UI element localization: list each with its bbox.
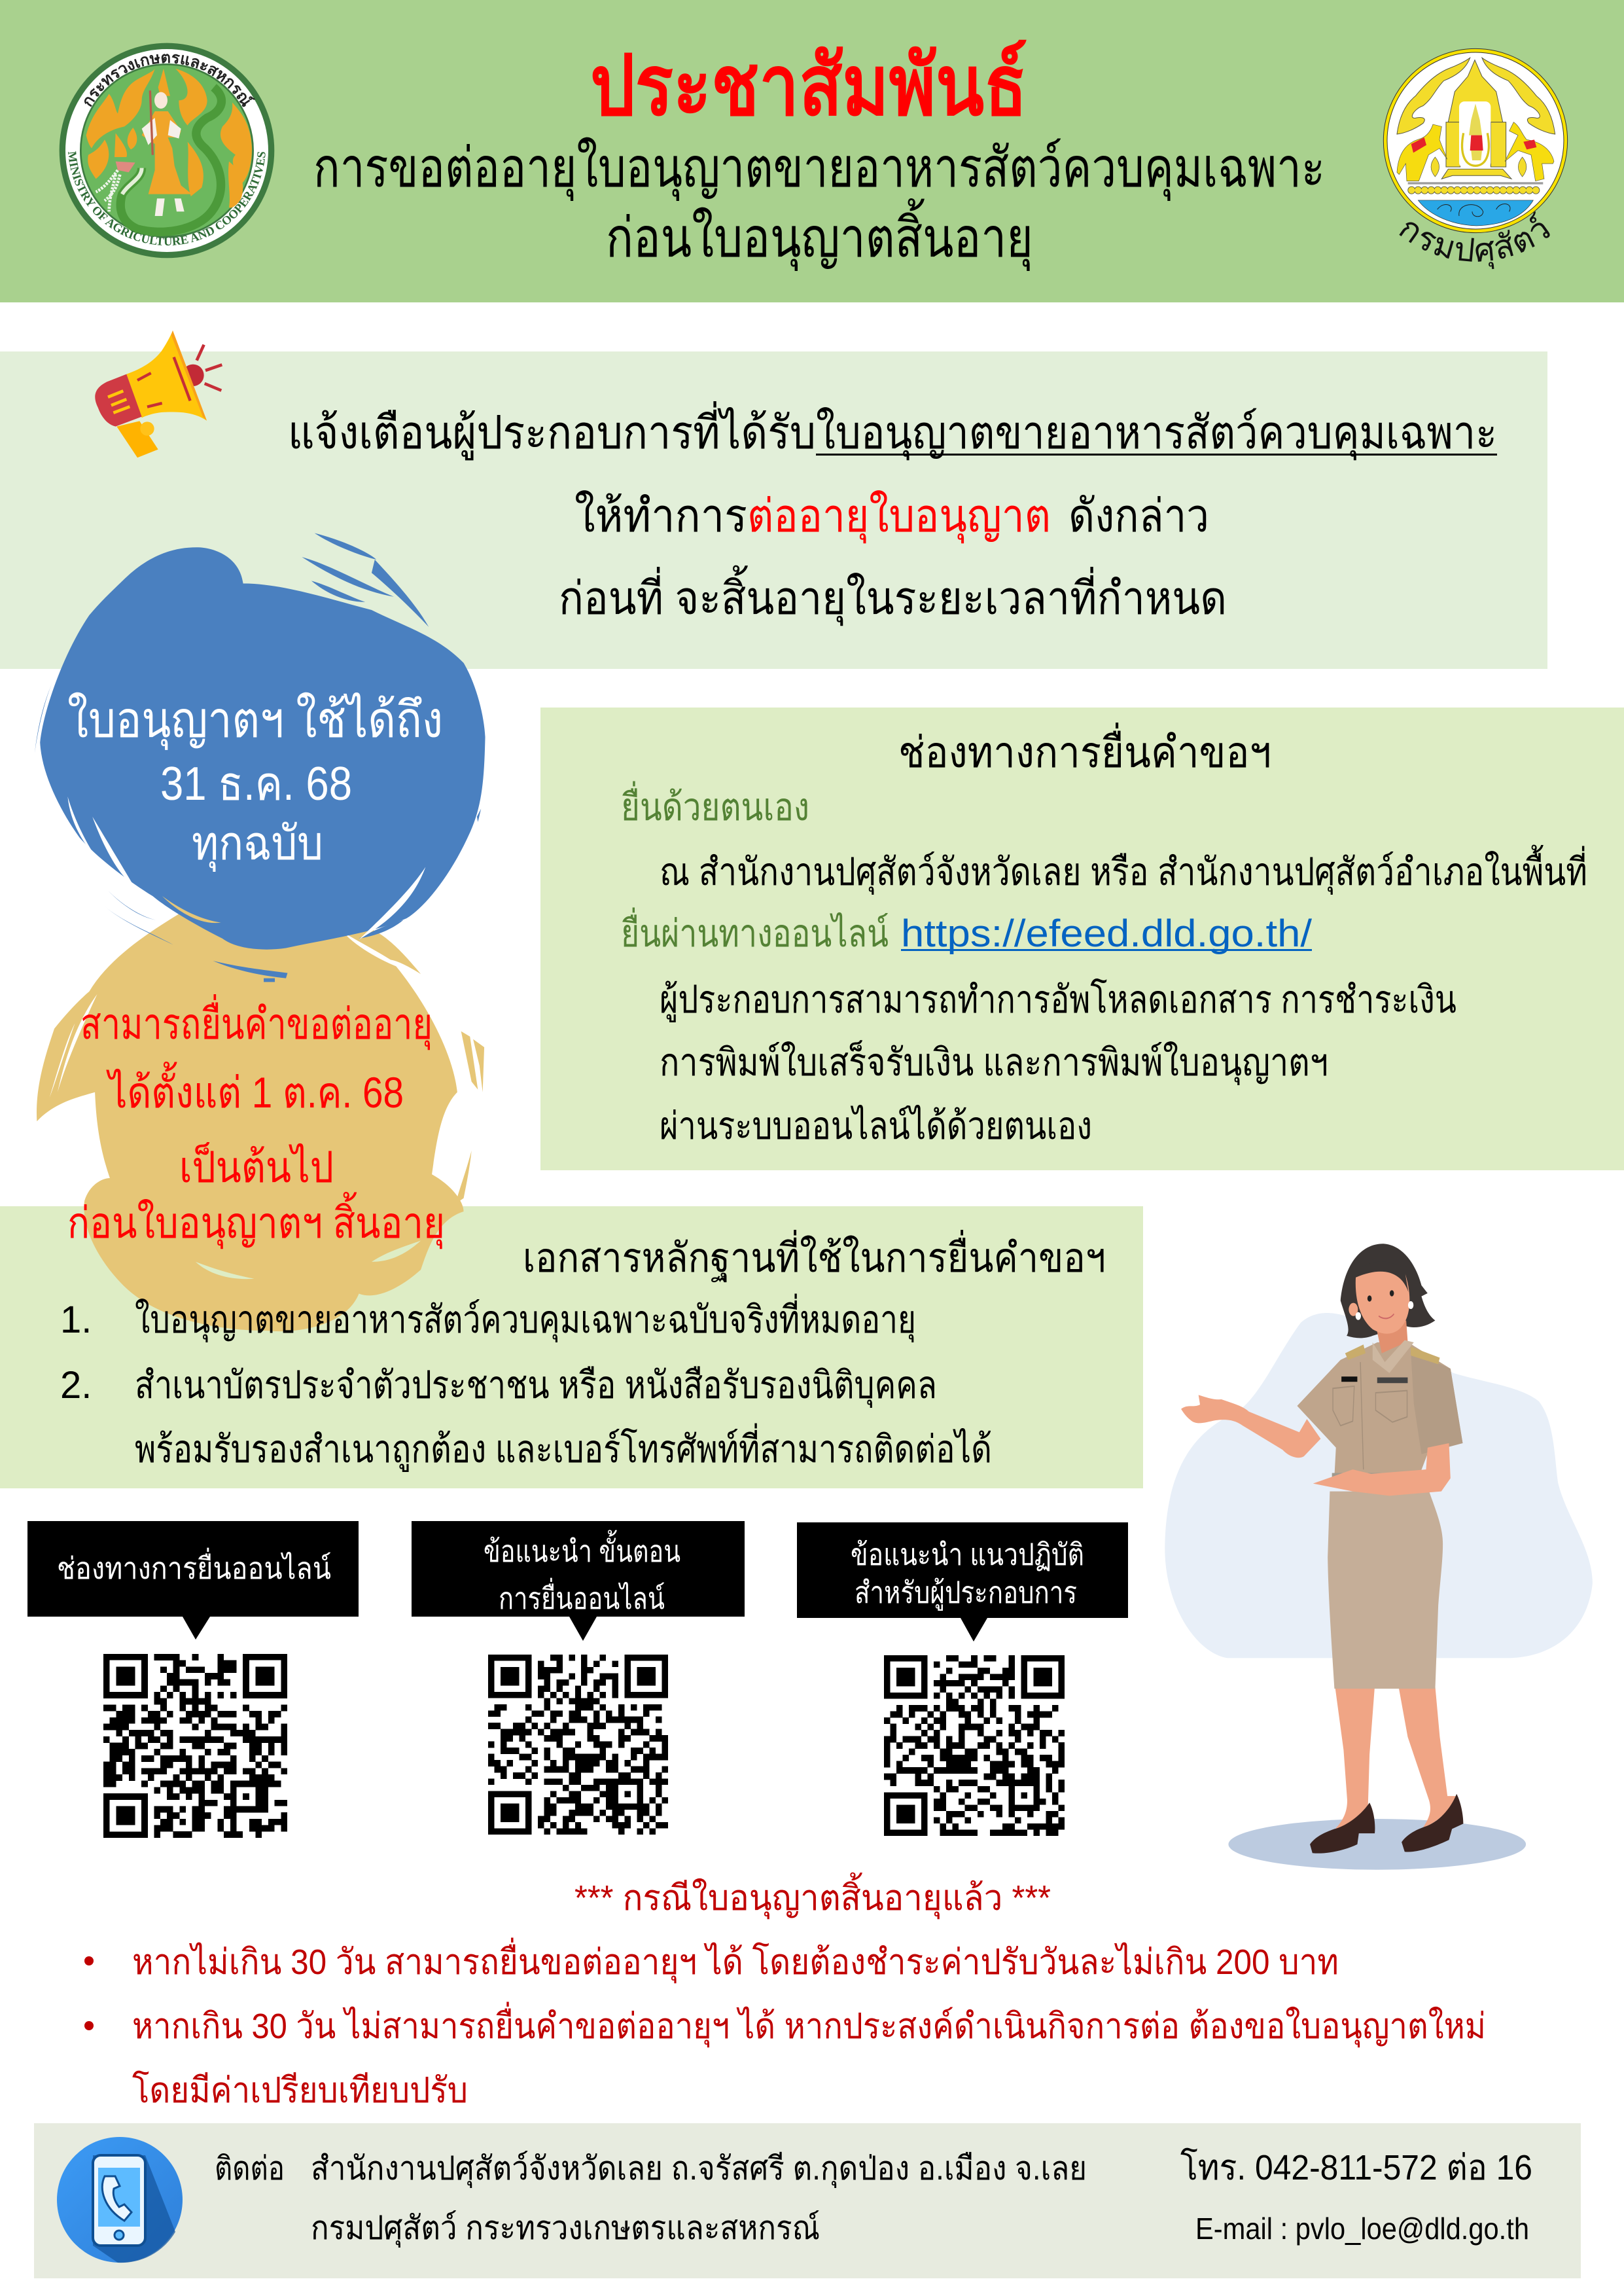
- documents item 2: 2.: [60, 1364, 92, 1407]
- bullet 1: หากไม่เกิน 30 วัน สามารถยื่นขอต่ออายุฯ ได้ โดยต้องชำระค่าปรับวันละไม่เกิน 200 บาท: [132, 1937, 1339, 1984]
- documents item 1: [60, 1293, 916, 1343]
- channel: in person label: ยื่นด้วยตนเอง: [621, 781, 809, 829]
- callout: online channel: ช่องทางการยื่นออนไลน์: [57, 1547, 331, 1585]
- notice line 3: ก่อนที่ จะสิ้นอายุในระยะเวลาที่กำหนด: [559, 565, 1227, 626]
- orange circle line 4: ก่อนใบอนุญาตฯ สิ้นอายุ: [67, 1192, 445, 1249]
- panel: required documents: [0, 1206, 1143, 1488]
- bullet 2: โดยมีค่าเปรียบเทียบปรับ: [132, 2070, 468, 2110]
- documents item 1: 1.: [60, 1299, 92, 1341]
- callout: online channel: [27, 1521, 359, 1640]
- callout: guidance for operators: สำหรับผู้ประกอบการ: [855, 1575, 1077, 1611]
- callout: guidance for operators: ข้อแนะนำ แนวปฏิบัติ: [851, 1537, 1084, 1571]
- channel: online link: https://efeed.dld.go.th/: [901, 912, 1313, 955]
- subtitle line 2: ก่อนใบอนุญาตสิ้นอายุ: [606, 198, 1033, 272]
- icon: orange brush circle: [37, 906, 484, 1331]
- icon: department of livestock emblem: กรมปศุสัตว์: [1399, 211, 1550, 270]
- panel: header banner: [0, 0, 1624, 302]
- subtitle line 1: การขอต่ออายุใบอนุญาตขายอาหารสัตว์ควบคุมเฉพาะ: [313, 137, 1325, 202]
- channel: online text line 2: การพิมพ์ใบเสร็จรับเงิน และการพิมพ์ใบอนุญาตฯ: [660, 1040, 1328, 1086]
- QR code 2: [488, 1655, 668, 1835]
- contact line 1: ติดต่อ: [215, 2150, 285, 2187]
- orange circle line 3: เป็นต้นไป: [179, 1141, 334, 1191]
- callout: online steps: การยื่นออนไลน์: [499, 1577, 665, 1615]
- panel: submission channels: [540, 708, 1624, 1170]
- notice line 2: [574, 490, 1209, 544]
- notice line 1: แจ้งเตือนผู้ประกอบการที่ได้รับ: [288, 401, 816, 461]
- channel: online text line 3: ผ่านระบบออนไลน์ได้ด้วยตนเอง: [660, 1104, 1092, 1147]
- bullet 2: หากเกิน 30 วัน ไม่สามารถยื่นคำขอต่ออายุฯ ได้ หากประสงค์ดำเนินกิจการต่อ ต้องขอใบอนุญาตใหม่: [132, 2001, 1486, 2048]
- channels heading: ช่องทางการยื่นคำขอฯ: [898, 723, 1271, 776]
- channel: online label: ยื่นผ่านทางออนไลน์: [621, 907, 889, 955]
- icon: phone: [57, 2137, 183, 2263]
- blue circle line 1: ใบอนุญาตฯ ใช้ได้ถึง: [67, 692, 443, 750]
- panel: contact: [34, 2123, 1581, 2278]
- notice line 2: ดังกล่าว: [1068, 490, 1209, 541]
- icon: ministry of agriculture emblem: กระทรวงเกษตรและสหกรณ์: [84, 54, 255, 107]
- documents item 1: ใบอนุญาตขายอาหารสัตว์ควบคุมเฉพาะฉบับจริงที่หมดอายุ: [135, 1293, 916, 1343]
- blue circle line 3: ทุกฉบับ: [192, 817, 323, 872]
- notice line 1: ใบอนุญาตขายอาหารสัตว์ควบคุมเฉพาะ: [816, 406, 1497, 461]
- callout: online steps: [412, 1521, 745, 1641]
- notice line 2: ต่ออายุใบอนุญาต: [747, 490, 1051, 544]
- orange circle line 1: สามารถยื่นคำขอต่ออายุ: [80, 994, 432, 1050]
- callout: online steps: ข้อแนะนำ ขั้นตอน: [484, 1530, 680, 1568]
- documents item 2: สำเนาบัตรประจำตัวประชาชน หรือ หนังสือรับรองนิติบุคคล: [135, 1364, 937, 1408]
- illustration: government officer woman: [1165, 1244, 1593, 1870]
- QR code 3: [884, 1655, 1065, 1836]
- notice line 2: ให้ทำการ: [574, 490, 747, 541]
- expired licence heading: *** กรณีใบอนุญาตสิ้นอายุแล้ว ***: [574, 1873, 1051, 1920]
- icon: megaphone: [95, 331, 222, 457]
- icon: department of livestock emblem: [1383, 48, 1568, 270]
- email: E-mail : pvlo_loe@dld.go.th: [1195, 2212, 1529, 2246]
- notice line 1: [288, 401, 1497, 461]
- blue circle line 2: 31 ธ.ค. 68: [160, 758, 352, 810]
- contact line 1: สำนักงานปศุสัตว์จังหวัดเลย ถ.จรัสศรี ต.กุดป่อง อ.เมือง จ.เลย: [311, 2150, 1087, 2188]
- channel: online text line 1: ผู้ประกอบการสามารถทำการอัพโหลดเอกสาร การชำระเงิน: [660, 978, 1456, 1022]
- title: ประชาสัมพันธ์: [590, 39, 1027, 133]
- panel: notice: [0, 351, 1547, 669]
- documents item 2: [60, 1364, 992, 1472]
- documents item 2: พร้อมรับรองสำเนาถูกต้อง และเบอร์โทรศัพท์ที่สามารถติดต่อได้: [135, 1423, 992, 1472]
- documents heading: เอกสารหลักฐานที่ใช้ในการยื่นคำขอฯ: [523, 1230, 1106, 1282]
- bullet 2: [84, 2001, 1486, 2110]
- telephone: โทร. 042-811-572 ต่อ 16: [1180, 2147, 1532, 2187]
- orange circle line 2: ได้ตั้งแต่ 1 ต.ค. 68: [106, 1062, 404, 1117]
- icon: ministry of agriculture emblem: MINISTRY OF AGRICULTURE AND COOPERATIVES: [68, 151, 266, 246]
- icon: blue brush circle: [35, 533, 485, 982]
- QR code 1: [103, 1654, 287, 1838]
- contact line 2: กรมปศุสัตว์ กระทรวงเกษตรและสหกรณ์: [311, 2210, 820, 2248]
- icon: ministry of agriculture emblem: [59, 43, 275, 258]
- callout: guidance for operators: [797, 1522, 1128, 1641]
